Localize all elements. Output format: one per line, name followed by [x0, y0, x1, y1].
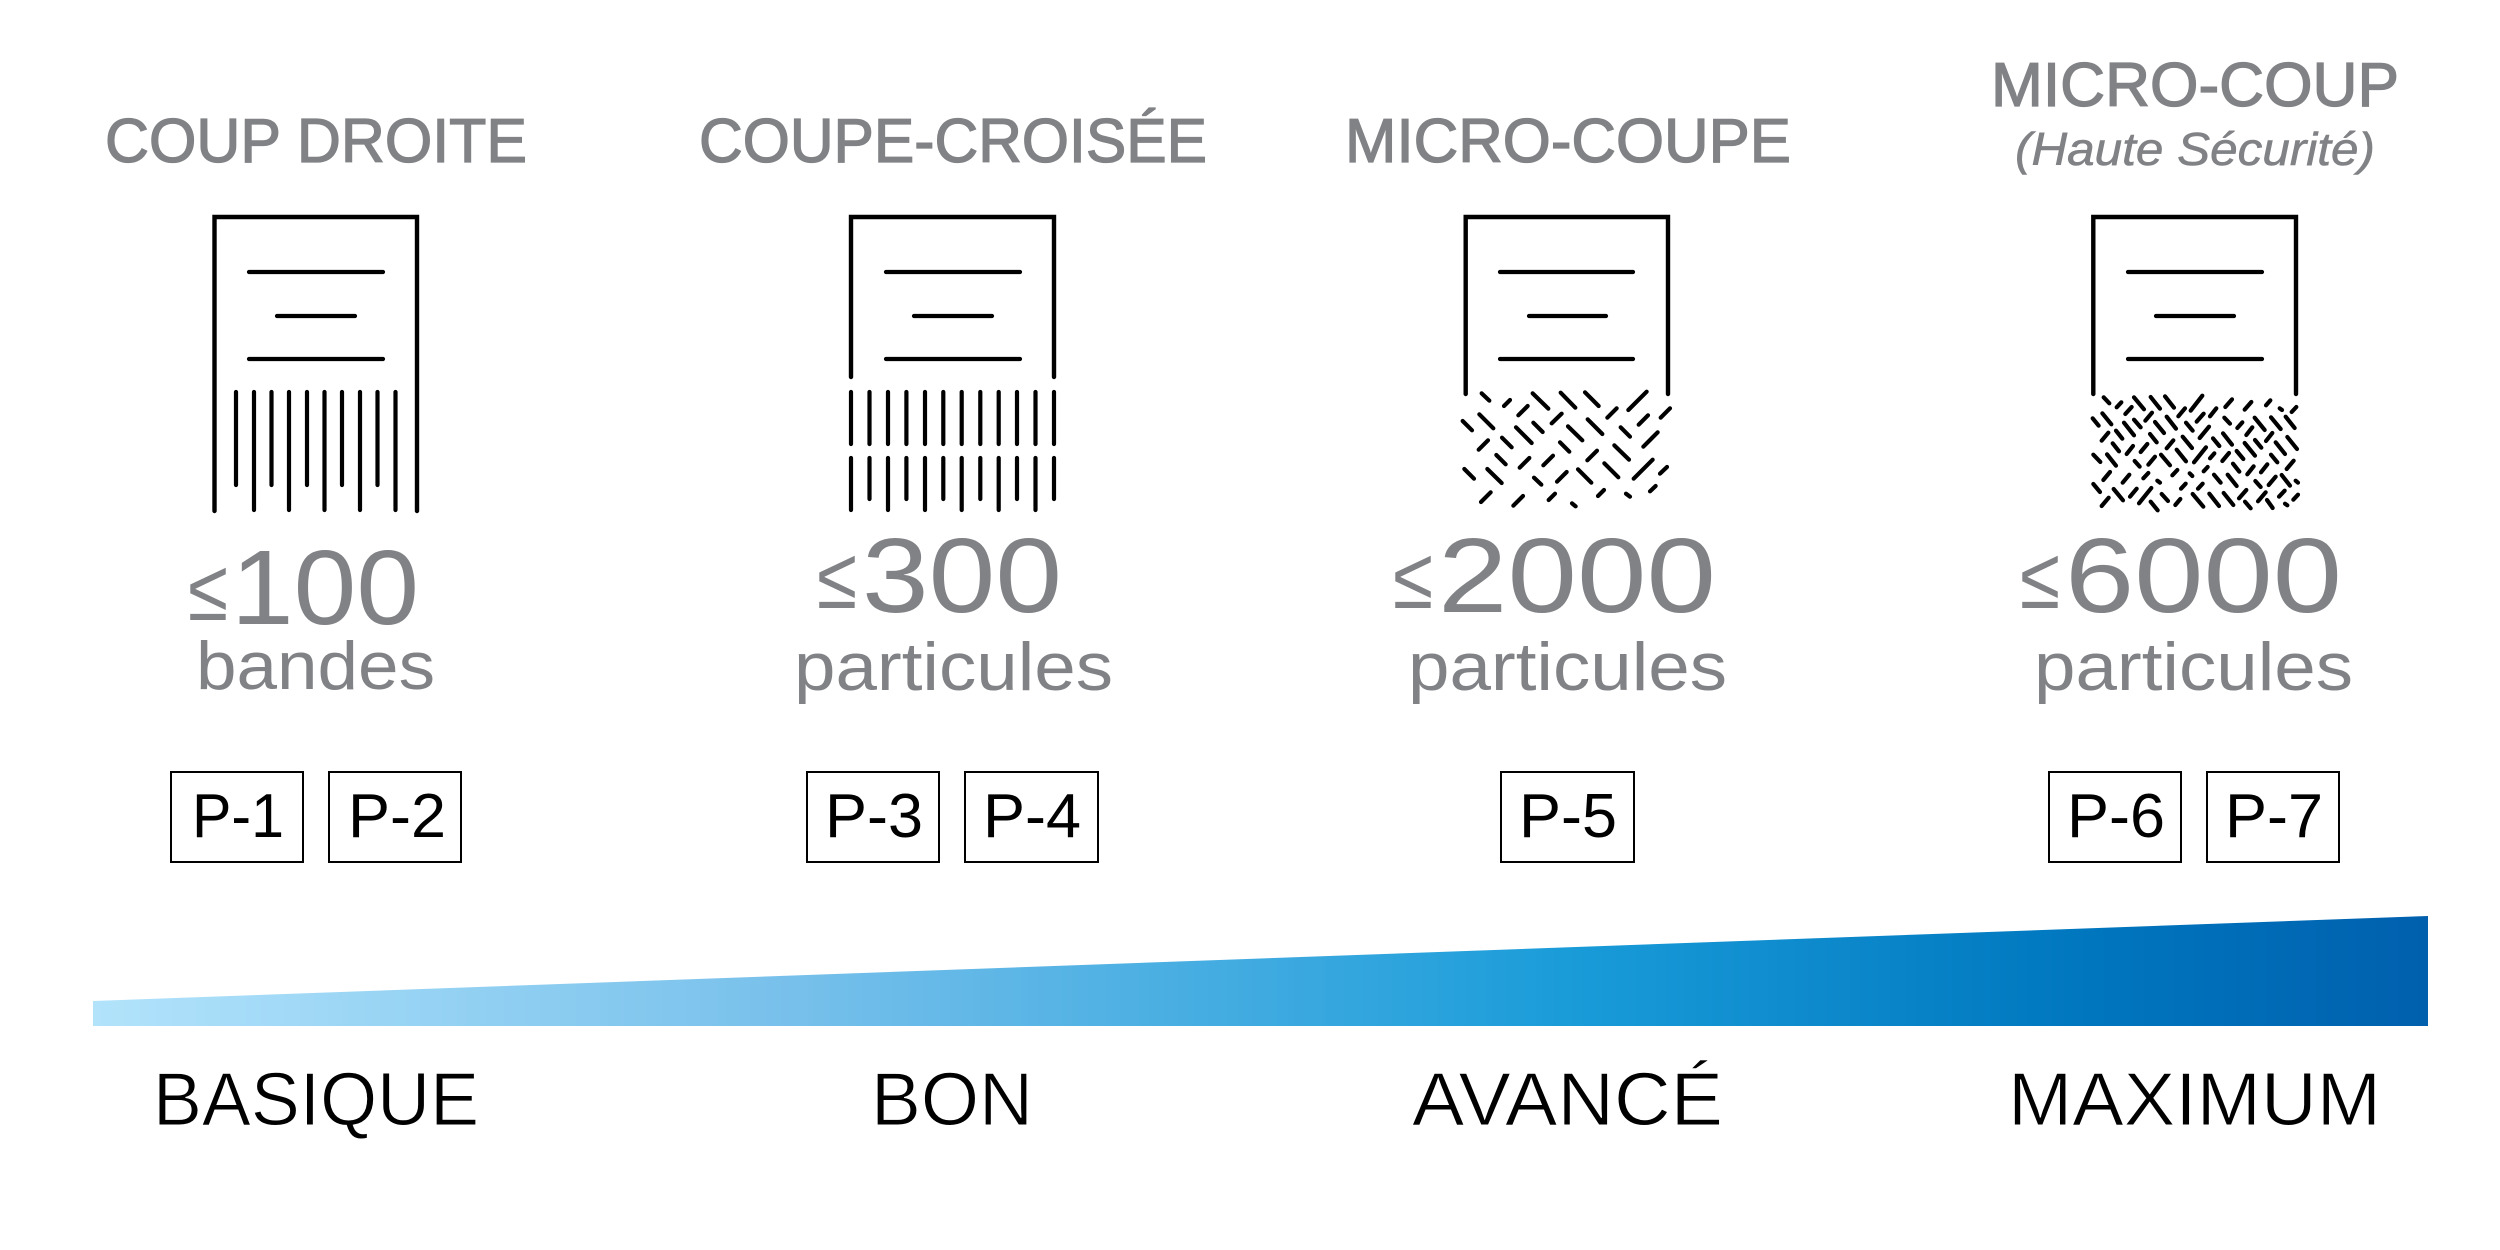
label: basique: BASIQUE: [153, 1057, 479, 1141]
heading: micro-coupe: MICRO-COUPE: [1345, 107, 1791, 176]
heading: micro-coup: MICRO-COUP: [1991, 51, 2399, 120]
icon: strip-cut paper: [214, 217, 417, 511]
unit: particules: particules: [1408, 629, 1727, 705]
badge: P-2: [329, 772, 461, 862]
unit: bandes: bandes: [196, 628, 435, 704]
panel: micro-coupe: [1345, 107, 1791, 862]
badge: P-7: P-7: [2225, 782, 2323, 851]
panel: micro-coup haute sécurité: [1991, 51, 2399, 862]
heading: coup droite: COUP DROITE: [105, 107, 527, 176]
unit: particules: particules: [794, 629, 1113, 705]
badge: P-3: [807, 772, 939, 862]
icon: high-security micro-cut paper: [2093, 217, 2298, 510]
badge: P-3: P-3: [825, 782, 923, 851]
badge: P-4: P-4: [983, 782, 1081, 851]
number: up to 6000 particles: ≤: [2020, 530, 2060, 627]
badge: P-2: P-2: [348, 782, 446, 851]
label: maximum: MAXIMUM: [2008, 1057, 2381, 1141]
icon: cross-cut paper: [851, 217, 1054, 510]
gradient wedge: security scale: [93, 916, 2428, 1026]
number: up to 2000 particles: ≤: [1393, 530, 1433, 627]
badge: P-5: [1501, 772, 1634, 862]
number: up to 6000 particles: 6000: [2065, 517, 2342, 635]
unit: particules: particules: [2034, 629, 2353, 705]
number: up to 100 strips: 100: [231, 529, 419, 647]
number: up to 300 particles: 300: [862, 517, 1062, 635]
label: bon: BON: [871, 1057, 1033, 1141]
number: up to 2000 particles: 2000: [1438, 517, 1716, 635]
badge: P-1: [171, 772, 303, 862]
panel: coupe-croisée: [699, 107, 1207, 862]
badge: P-4: [965, 772, 1098, 862]
badge: P-1: P-1: [192, 782, 284, 851]
badge: P-6: P-6: [2067, 782, 2165, 851]
panel: coup droite: [105, 107, 527, 862]
number: up to 300 particles: ≤: [817, 530, 857, 627]
badge: P-6: [2049, 772, 2181, 862]
label: avancé: AVANCÉ: [1412, 1057, 1723, 1141]
badge: P-5: P-5: [1519, 782, 1617, 851]
number: up to 100 strips: ≤: [188, 542, 228, 639]
icon: micro-cut paper: [1463, 217, 1670, 506]
subheading: haute sécurité: (Haute Sécurité): [2015, 123, 2375, 175]
heading: coupe-croisée: COUPE-CROISÉE: [699, 107, 1207, 176]
badge: P-7: [2207, 772, 2339, 862]
